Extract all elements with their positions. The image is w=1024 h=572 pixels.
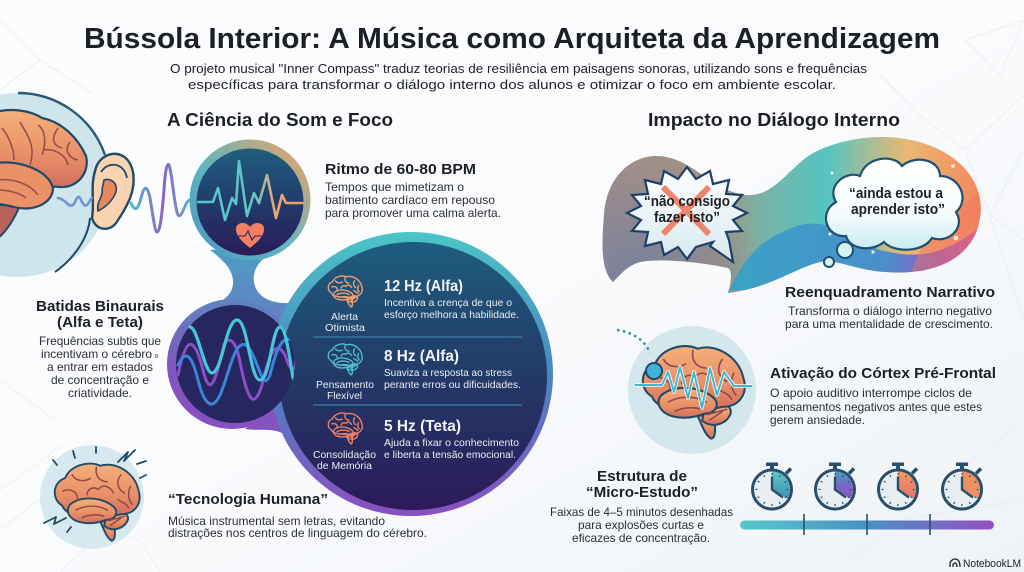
heart rate circle — [190, 140, 310, 260]
description: 8 Hz — [384, 367, 521, 391]
icon: brain teal — [328, 344, 362, 375]
logo: notebooklm: NotebookLM — [963, 558, 1021, 570]
row: 8 Hz — [316, 344, 521, 402]
text: reenquadramento narrativo: Reenquadramento Narrativo — [785, 284, 995, 301]
negative speech burst: “não consigo — [644, 194, 730, 210]
waves — [178, 320, 296, 404]
speech transformation blob — [602, 137, 981, 293]
text: ativação: pensamentos negativos antes que estes — [770, 400, 982, 414]
subtitle: O projeto musical "Inner Compass" traduz teorias de resiliência em paisagens sonoras, utilizando sons e frequências — [170, 61, 868, 76]
timers — [752, 462, 982, 509]
text: ativação: gerem ansiedade. — [770, 413, 865, 427]
negative speech burst — [627, 167, 747, 262]
description: 12 Hz: Incentiva a crença de que o — [384, 297, 512, 309]
label: alerta otimista — [325, 311, 365, 334]
description: 8 Hz: Suaviza a resposta ao stress — [384, 367, 512, 379]
row: 12 Hz — [325, 276, 519, 334]
label: pensamento flexível: Pensamento — [316, 379, 374, 391]
text: batidas binaurais: incentivam o cérebro — [41, 347, 152, 361]
heading: 12 Hz: 12 Hz (Alfa) — [384, 278, 463, 295]
icon: calm brain — [40, 445, 146, 549]
label: alerta otimista: Alerta — [331, 311, 358, 323]
icon: timer 1 — [752, 462, 792, 509]
label: alerta otimista: Otimista — [325, 322, 365, 334]
wave circle — [176, 305, 296, 423]
sound wave in — [58, 197, 92, 206]
text: batidas binaurais: de concentração e — [51, 373, 149, 387]
icon: timer 4 — [942, 462, 982, 509]
connector: neck — [206, 245, 312, 340]
icon: heart — [236, 223, 264, 248]
ring behind wave circle — [167, 299, 297, 429]
label: consolidação de memória: de Memória — [317, 460, 372, 472]
text: tecnologia humana: “Tecnologia Humana” — [168, 492, 328, 508]
positive thought cloud — [824, 159, 963, 267]
illustration: brain and ear — [0, 93, 134, 277]
positive thought cloud: aprender isto” — [851, 202, 945, 218]
text: batidas binaurais: (Alfa e Teta) — [57, 315, 143, 331]
text: batidas binaurais: criatividade. — [68, 386, 132, 400]
sparkles — [828, 164, 958, 254]
label: consolidação de memória — [313, 449, 376, 472]
icon: brain prefrontal — [617, 326, 756, 454]
text: batidas binaurais: a entrar em estados — [47, 360, 153, 374]
description: 5 Hz: e liberta a tensão emocional. — [384, 449, 516, 461]
icon: timer 3 — [878, 462, 918, 509]
text: batidas binaurais — [36, 299, 164, 400]
connector: purple web — [245, 395, 345, 490]
label: pensamento flexível — [316, 379, 374, 402]
heading: 5 Hz: 5 Hz (Teta) — [384, 418, 461, 435]
text: batidas binaurais: Batidas Binaurais — [36, 299, 164, 315]
subtitle — [170, 61, 868, 92]
text: reenquadramento narrativo — [785, 284, 995, 331]
text: tecnologia humana: Música instrumental sem letras, evitando — [168, 514, 385, 528]
text: ritmo: Ritmo de 60-80 BPM — [325, 162, 476, 178]
description: 5 Hz: Ajuda a fixar o conhecimento — [384, 437, 519, 449]
big frequency circle — [269, 232, 553, 516]
text: ritmo: para promover uma calma alerta. — [325, 206, 501, 220]
label: consolidação de memória: Consolidação — [313, 449, 376, 461]
timeline bar — [740, 514, 994, 535]
negative speech burst: fazer isto” — [654, 210, 720, 226]
subtitle: específicas para transformar o diálogo interno dos alunos e otimizar o foco em ambiente escolar. — [188, 77, 836, 92]
positive thought cloud: “ainda estou a — [849, 186, 944, 202]
text: ritmo — [325, 162, 501, 220]
text: batidas binaurais: Frequências subtis que — [39, 334, 161, 348]
icon: timer 2 — [816, 462, 854, 509]
text: tecnologia humana — [168, 492, 427, 540]
text: ativação — [770, 365, 996, 427]
heading: ciência: A Ciência do Som e Foco — [167, 109, 393, 130]
text: micro-estudo — [550, 469, 733, 545]
description: 5 Hz — [384, 437, 519, 461]
heading: impacto: Impacto no Diálogo Interno — [648, 109, 900, 130]
text: ativação: Ativação do Córtex Pré-Frontal — [770, 365, 996, 382]
text: ritmo: Tempos que mimetizam o — [325, 180, 464, 194]
text: micro-estudo: Faixas de 4–5 minutos desenhadas — [550, 505, 733, 519]
text: ritmo: batimento cardíaco em repouso — [325, 193, 495, 207]
description: 12 Hz: esforço melhora a habilidade. — [384, 309, 519, 321]
label: pensamento flexível: Flexível — [327, 390, 362, 402]
icon: brain orange — [328, 276, 362, 307]
sound wave out — [131, 164, 194, 232]
text: micro-estudo: Estrutura de — [597, 469, 687, 485]
text: micro-estudo: para explosões curtas e — [578, 518, 704, 532]
ecg line — [197, 161, 304, 220]
text: reenquadramento narrativo: Transforma o diálogo interno negativo — [788, 304, 992, 318]
icon: brain coral — [328, 413, 362, 444]
text: micro-estudo: eficazes de concentração. — [572, 531, 710, 545]
text: reenquadramento narrativo: para uma mentalidade de crescimento. — [785, 317, 993, 331]
text: ativação: O apoio auditivo interrompe ciclos de — [770, 386, 972, 400]
title: Bússola Interior: A Música como Arquiteta da Aprendizagem — [84, 23, 940, 55]
text: micro-estudo: “Micro-Estudo” — [586, 485, 698, 501]
text: tecnologia humana: distrações nos centros de linguagem do cérebro. — [168, 526, 427, 540]
description: 12 Hz — [384, 297, 519, 321]
description: 8 Hz: perante erros ou dificuidades. — [384, 379, 521, 391]
heading: 8 Hz: 8 Hz (Alfa) — [384, 348, 459, 365]
row: 5 Hz — [313, 413, 519, 472]
